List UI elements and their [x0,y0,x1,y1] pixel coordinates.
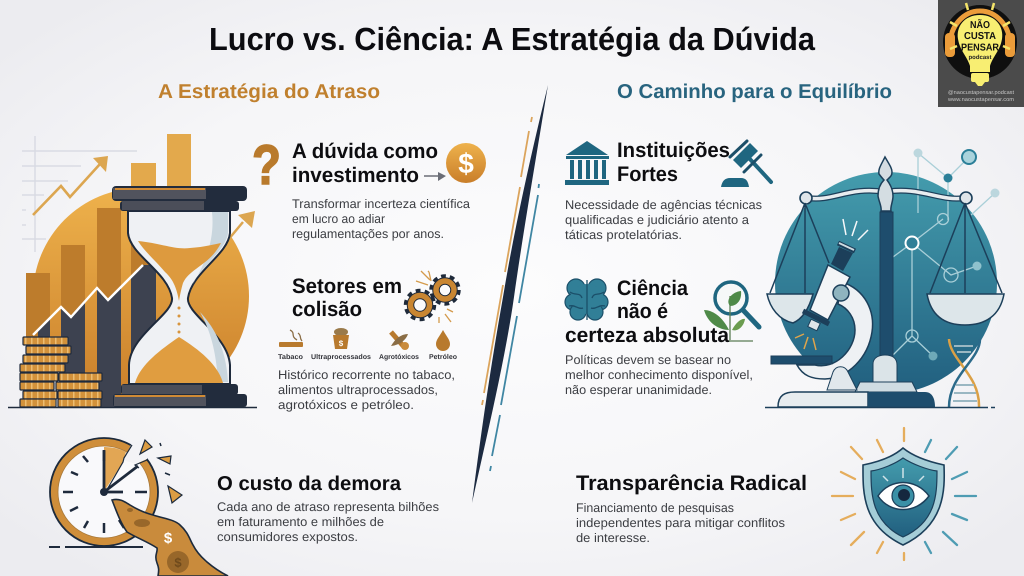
icon: arrow to coin: $ [458,148,474,179]
baseline [8,406,257,408]
hourglass glass [128,211,230,384]
logo: podcast badge [938,0,1024,107]
text block: strong institutions: Necessidade de agências técnicas [565,198,762,212]
text block: doubt as investment: regulamentações por anos. [292,227,444,241]
logo: podcast badge: www.naocustapensar.com [947,97,1015,103]
icon: oil drop [436,330,450,351]
hourglass caps [112,186,247,201]
text block: radical transparency: de interesse. [576,531,650,545]
illustration: hourglass, bars and coins [8,134,257,408]
text block: sectors body: alimentos ultraprocessados, [278,383,438,397]
text block: strong institutions: Instituições [617,139,730,162]
icon row: sectors: Petróleo [429,353,457,361]
text block: science is not certainty: não esperar unanimidade. [565,383,712,397]
icon: broken clock and money: $ [164,530,173,547]
text block: strong institutions: qualificadas e judiciário atento a [565,213,749,227]
logo: podcast badge: NÃO [970,19,990,31]
scale beam [808,191,965,199]
text block: radical transparency [576,472,807,545]
network nodes [893,153,995,356]
icon: broken clock and money [49,438,228,576]
text block: doubt as investment: A dúvida como [292,140,438,163]
text block: science is not certainty: melhor conhecimento disponível, [565,368,753,382]
teal circle [775,172,997,394]
pans [770,203,1002,293]
text block: radical transparency: Transparência Radical [576,472,807,495]
text block: sectors heading: Setores em [292,275,402,298]
chart grid [22,136,137,252]
baseline [765,406,995,408]
icon row: sectors: Agrotóxicos [379,353,419,361]
icon: shield with eye [832,428,976,560]
text block: science is not certainty: Políticas devem se basear no [565,353,731,367]
text block: doubt as investment [292,140,470,241]
text block: doubt as investment: Transformar incerteza científica [292,197,470,211]
logo: podcast badge: CUSTA [964,31,996,42]
icon: gears [406,271,458,323]
illustration: scales, microscope and dna [765,148,1004,408]
icon: question mark: ? [252,133,281,196]
icon: broken clock and money: $ [174,555,182,570]
text block: strong institutions: Fortes [617,163,678,186]
icon row: sectors [278,328,457,361]
text block: sectors body [278,368,455,412]
text block: science is not certainty: Ciência [617,277,688,300]
bars [131,163,156,193]
icon: gavel [721,141,771,187]
icon: ultraprocessed food [333,328,349,349]
icon: brain [565,279,608,320]
text block: science is not certainty: certeza absoluta [565,324,729,347]
heading: right column: O Caminho para o Equilíbrio [617,81,892,103]
text block: radical transparency: independentes para mitigar conflitos [576,516,785,530]
logo: podcast badge: podcast [968,54,992,61]
text block: cost of delay [217,473,439,544]
icon row: sectors: Tabaco [278,353,303,361]
text block: sectors body: agrotóxicos e petróleo. [278,398,414,412]
small arrow [33,164,100,215]
text block: strong institutions [565,139,762,242]
text block: sectors heading: colisão [292,298,362,321]
text block: sectors heading [292,275,402,321]
icon: institution building [565,141,609,185]
text block: doubt as investment: em lucro ao adiar [292,212,385,226]
text block: cost of delay: Cada ano de atraso representa bilhões [217,500,439,514]
text block: radical transparency: Financiamento de pesquisas [576,501,734,515]
orange circle [33,188,249,404]
icon: arrow to coin [424,143,486,183]
logo: podcast badge: PENSAR [961,42,1000,54]
icon: magnifier and plant [704,282,759,342]
text block: sectors body: Histórico recorrente no tabaco, [278,368,455,382]
text block: cost of delay: O custo da demora [217,473,402,495]
heading: left column: A Estratégia do Atraso [158,81,380,103]
text block: cost of delay: consumidores expostos. [217,530,358,544]
text block: doubt as investment: investimento [292,164,419,187]
text block: science is not certainty: não é [617,300,668,323]
icon row: sectors: Ultraprocessados [311,353,371,361]
icon: ultraprocessed food: $ [339,339,344,348]
text block: strong institutions: táticas protelatórias. [565,228,682,242]
icon: pesticide [391,332,409,350]
text block: cost of delay: em faturamento e milhões de [217,515,384,529]
divider: diagonal slash [472,85,548,503]
title: Lucro vs. Ciência: A Estratégia da Dúvida [209,21,815,57]
microscope [797,282,873,379]
dna [949,339,979,407]
logo: podcast badge: @naocustapensar.podcast [948,90,1015,96]
column [880,212,893,358]
text block: science is not certainty [565,277,753,397]
coins [20,337,102,407]
icon: cigarette [279,330,303,347]
